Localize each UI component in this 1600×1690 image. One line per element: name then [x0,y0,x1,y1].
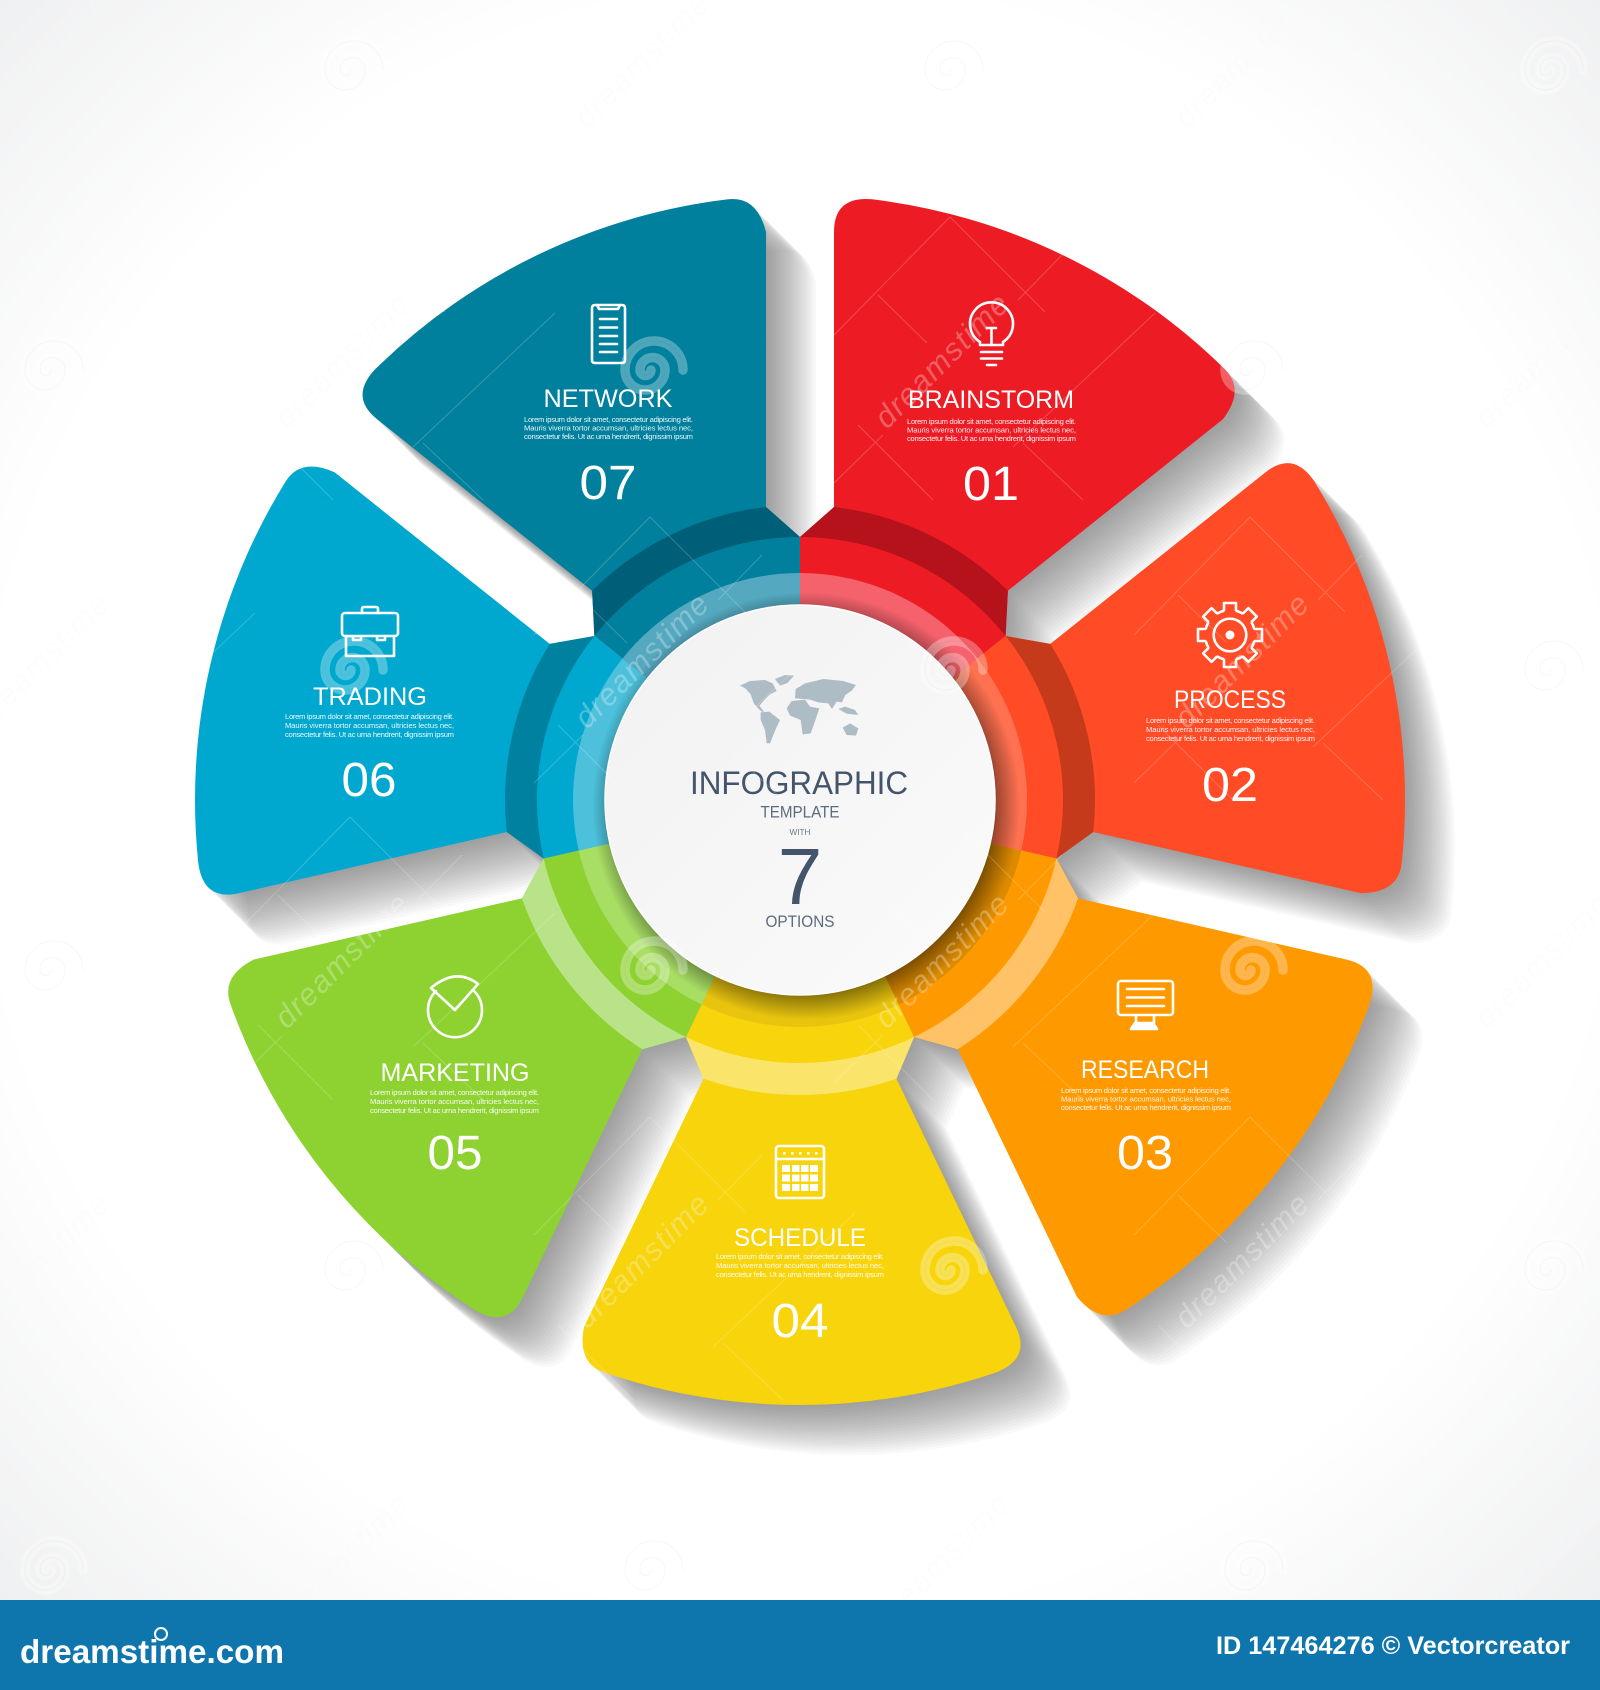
text block: research: Mauris viverra tortor accumsan, ultricies lectus nec, [1061,1094,1231,1104]
center subtitle: TEMPLATE [760,802,840,822]
icon: monitor [1118,981,1173,1029]
number 05: 05 [428,1127,482,1180]
panel: 07 network [330,85,1071,800]
text block: schedule: Mauris viverra tortor accumsan, ultricies lectus nec, [716,1261,884,1270]
text block: network: consectetur felis. Ut ac urna hendrerit, dignissim ipsum [524,432,693,441]
center caption: OPTIONS [766,912,834,931]
heading: schedule: SCHEDULE [734,1224,866,1252]
text block: marketing: Mauris viverra tortor accumsan, ultricies lectus nec, [370,1097,539,1106]
text block: marketing: consectetur felis. Ut ac urna hendrerit, dignissim ipsum [370,1106,539,1115]
icon: light bulb [970,302,1013,365]
text block: schedule: Lorem ipsum dolor sit amet, consectetur adipiscing elit. [716,1252,884,1261]
text block: network: Lorem ipsum dolor sit amet, consectetur adipiscing elit. [524,415,693,424]
heading: brainstorm: BRAINSTORM [908,386,1074,414]
center small label: WITH [790,827,810,837]
footer bar [0,1600,1600,1690]
watermark overlay: dreamstime [267,1486,416,1635]
icon: world map [740,675,858,743]
panel: 03 research [703,800,1386,1358]
number 06: 06 [342,754,396,807]
text block: research [1061,1086,1231,1112]
center disc [592,592,1020,1020]
icon: calendar [776,1146,824,1198]
text block: marketing [370,1088,539,1115]
text block: process: Mauris viverra tortor accumsan, ultricies lectus nec, [1146,725,1315,734]
text block: brainstorm: consectetur felis. Ut ac urna hendrerit, dignissim ipsum [907,434,1076,443]
icon: gear [1198,603,1262,667]
number 01: 01 [963,458,1019,511]
text block: research: Lorem ipsum dolor sit amet, consectetur adipiscing elit. [1061,1086,1231,1095]
number 02: 02 [1202,759,1258,812]
watermark overlay: dreamstime [1167,586,1316,735]
text block: schedule [716,1252,884,1279]
watermark overlay: dreamstime [867,286,1016,435]
heading: process: PROCESS [1174,686,1286,714]
heading: network: NETWORK [544,385,673,413]
text block: brainstorm: Mauris viverra tortor accumsan, ultricies lectus nec, [907,426,1076,434]
text block: research: consectetur felis. Ut ac urna hendrerit, dignissim ipsum [1061,1103,1231,1112]
text block: trading: Lorem ipsum dolor sit amet, consectetur adipiscing elit. [285,712,454,721]
center number 7: 7 [778,832,822,921]
panel: 01 brainstorm [800,199,1235,800]
center title: INFOGRAPHIC [690,765,908,801]
text block: network: Mauris viverra tortor accumsan, ultricies lectus nec, [524,424,693,432]
watermark overlay: dreamstime [567,586,716,735]
text block: brainstorm [907,417,1076,443]
text block: brainstorm: Lorem ipsum dolor sit amet, consectetur adipiscing elit. [907,417,1076,426]
panel: 06 trading [117,376,800,934]
text block: trading [285,712,454,739]
watermark overlay: dreamstime [267,886,416,1035]
text block: process: consectetur felis. Ut ac urna hendrerit, dignissim ipsum [1146,734,1315,743]
watermark overlay: dreamstime [567,1186,716,1335]
number 03: 03 [1117,1127,1173,1180]
panel: 02 process [800,425,1541,1140]
text block: schedule: consectetur felis. Ut ac urna hendrerit, dignissim ipsum [716,1270,884,1279]
footer logo swirl [155,1628,167,1640]
icon: server [592,305,625,363]
text block: network [524,415,693,441]
icon: pie chart [428,976,482,1037]
text block: process [1146,716,1315,743]
watermark overlay: dreamstime [1167,1186,1316,1335]
panel: 05 marketing [148,611,800,1341]
number 07: 07 [580,457,636,510]
number 04: 04 [772,1295,828,1348]
heading: trading: TRADING [313,683,427,711]
watermark overlay: dreamstime [867,886,1016,1035]
heading: research: RESEARCH [1081,1056,1209,1084]
footer image credit: ID 147464276 © Vectorcreator [1216,1632,1570,1660]
text block: marketing: Lorem ipsum dolor sit amet, consectetur adipiscing elit. [370,1088,539,1097]
panel: 04 schedule [408,800,1061,1530]
text block: process: Lorem ipsum dolor sit amet, consectetur adipiscing elit. [1146,716,1315,725]
icon: briefcase [342,607,398,656]
heading: marketing: MARKETING [380,1059,530,1087]
text block: trading: Mauris viverra tortor accumsan, ultricies lectus nec, [285,721,454,730]
footer logo text: dreamstime.com [20,1633,284,1670]
text block: trading: consectetur felis. Ut ac urna hendrerit, dignissim ipsum [285,730,454,739]
watermark overlay: dreamstime [267,286,416,435]
watermark overlay: dreamstime [867,1486,1016,1635]
